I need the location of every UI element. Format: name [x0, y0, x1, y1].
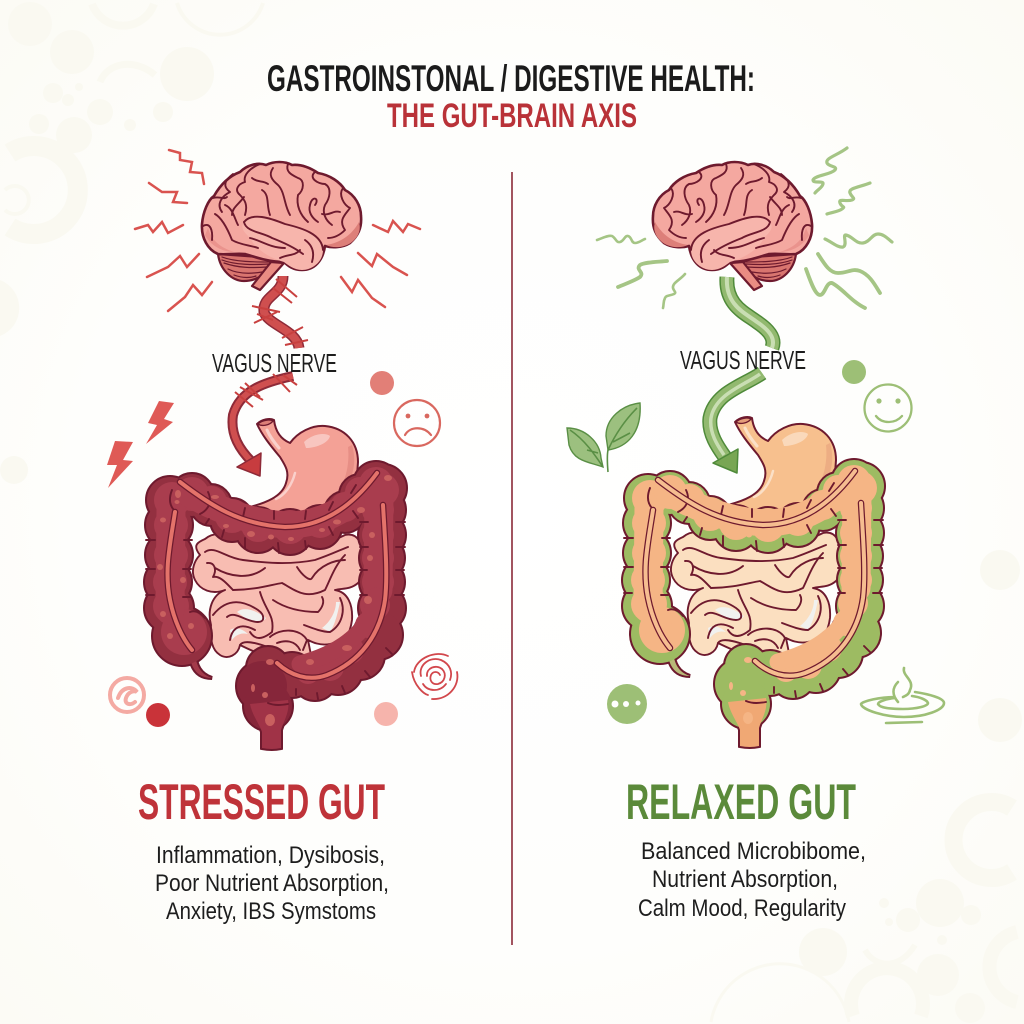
title: THE GUT-BRAIN AXIS [387, 97, 637, 135]
text block: relaxed gut benefits: Nutrient Absorption, [652, 866, 838, 893]
stress signals around brain [135, 150, 420, 311]
panel: stressed gut [107, 150, 457, 925]
title: GASTROINSTONAL / DIGESTIVE HEALTH: [267, 58, 755, 99]
vagus nerve upper, smooth [727, 277, 773, 348]
brain [202, 162, 361, 290]
vagus nerve upper, frayed [252, 276, 308, 348]
heading: relaxed gut: RELAXED GUT [626, 774, 856, 830]
heading: stressed gut: STRESSED GUT [138, 774, 385, 830]
digestive tract [145, 419, 406, 749]
icon: pink dot [374, 702, 398, 726]
label: vagus nerve: VAGUS NERVE [680, 345, 806, 375]
background pattern: bottom-right [711, 550, 1022, 1023]
icon: lightning bolt [107, 441, 133, 488]
calm signals around brain [597, 148, 892, 308]
text block: stressed gut effects [155, 842, 389, 925]
background pattern: top-left [0, 2, 263, 484]
text block: stressed gut effects: Poor Nutrient Absorption, [155, 870, 389, 897]
digestive tract [623, 417, 884, 747]
icon: calm water ripple [861, 668, 944, 723]
text block: relaxed gut benefits: Calm Mood, Regularity [638, 895, 846, 922]
brain [653, 162, 812, 290]
icon: red dot [370, 371, 394, 395]
text block: relaxed gut benefits [638, 838, 866, 922]
icon: dark red dot [146, 703, 170, 727]
text block: relaxed gut benefits: Balanced Microbibome, [641, 838, 866, 865]
icon: smiley face [864, 384, 912, 432]
text block: stressed gut effects: Inflammation, Dysibosis, [156, 842, 385, 869]
title [267, 58, 755, 135]
icon: spiral [412, 654, 457, 699]
icon: green dot [842, 360, 866, 384]
vagus nerve lower arrow, smooth [710, 373, 762, 473]
icon: sad face [394, 400, 440, 446]
icon: pink swirl [110, 678, 144, 712]
vagus nerve lower arrow [232, 374, 297, 476]
text block: stressed gut effects: Anxiety, IBS Symstoms [166, 898, 376, 925]
icon: speech dots [607, 684, 647, 724]
center divider [511, 172, 513, 945]
icon: leaves [567, 403, 640, 472]
panel: relaxed gut [567, 148, 944, 922]
label: vagus nerve: VAGUS NERVE [212, 348, 337, 378]
icon: lightning bolt [146, 401, 174, 444]
